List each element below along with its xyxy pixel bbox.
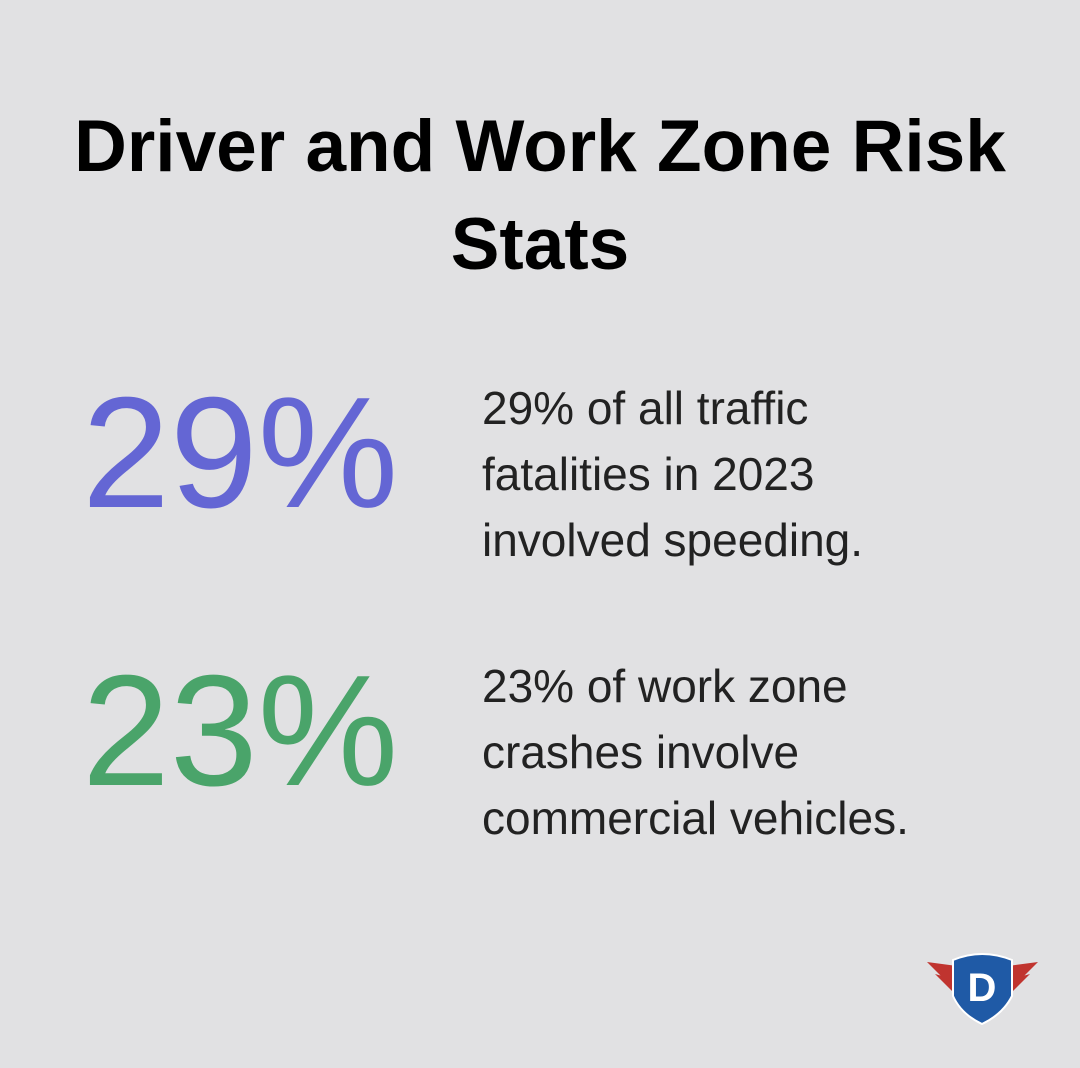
- stat text: commercial vehicles: commercial vehicles.: [482, 792, 909, 844]
- stat text: commercial vehicles: 23% of work zone: [482, 660, 848, 712]
- stat text: speeding: involved speeding.: [482, 514, 863, 566]
- stat text: commercial vehicles: crashes involve: [482, 726, 799, 778]
- title: Stats: [451, 204, 629, 285]
- stat text: speeding: 29% of all traffic: [482, 382, 808, 434]
- title: Driver and Work Zone Risk: [74, 106, 1006, 187]
- stat text: commercial vehicles: [482, 660, 909, 844]
- icon: logo shield with wings: [927, 953, 1038, 1025]
- icon: logo shield with wings: D: [968, 966, 996, 1010]
- stat text: speeding: fatalities in 2023: [482, 448, 814, 500]
- stat number: 29%: 29%: [82, 365, 398, 541]
- stat number: 23%: 23%: [82, 643, 398, 819]
- stat text: speeding: [482, 382, 863, 566]
- title: [74, 106, 1006, 285]
